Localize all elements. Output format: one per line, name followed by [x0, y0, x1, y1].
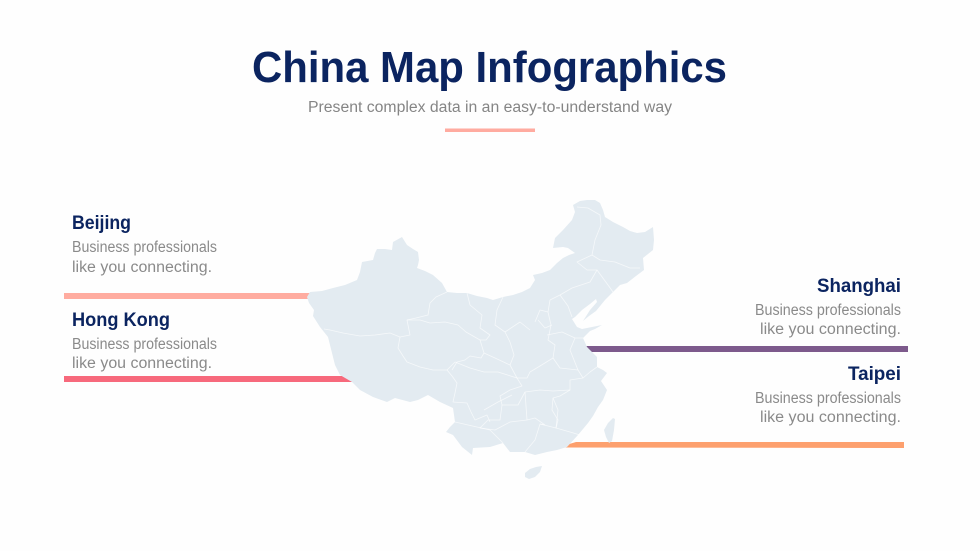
Hong Kong text: Business professionals: [72, 336, 217, 353]
Taipei heading: Taipei: [848, 364, 901, 385]
Shanghai label: [755, 276, 901, 338]
Beijing label: [72, 213, 217, 276]
subtitle: Present complex data in an easy-to-understand way: [308, 99, 672, 116]
Shanghai heading: Shanghai: [817, 276, 901, 297]
map of China: [307, 200, 654, 479]
Shanghai bar: [584, 346, 908, 352]
Shanghai label: like you connecting.: [760, 321, 901, 338]
Hong Kong label: like you connecting.: [72, 355, 212, 372]
Beijing text: Business professionals: [72, 239, 217, 256]
leader bars: [64, 293, 908, 448]
Taipei bar: [562, 442, 904, 448]
title underline: [445, 128, 535, 132]
Taiwan island: [604, 418, 615, 443]
Taipei label: [755, 364, 901, 426]
mainland: [307, 200, 654, 455]
Beijing heading: Beijing: [72, 213, 131, 234]
province borders: [324, 207, 640, 452]
Taipei text: Business professionals: [755, 390, 901, 407]
title: China Map Infographics: [252, 43, 727, 92]
Beijing bar: [64, 293, 310, 299]
Hong Kong label: [72, 310, 217, 372]
Hong Kong bar: [64, 376, 356, 382]
Hong Kong heading: Hong Kong: [72, 310, 170, 331]
Taipei label: like you connecting.: [760, 409, 901, 426]
Hainan island: [525, 466, 542, 479]
Shanghai text: Business professionals: [755, 302, 901, 319]
Beijing label: like you connecting.: [72, 259, 212, 276]
